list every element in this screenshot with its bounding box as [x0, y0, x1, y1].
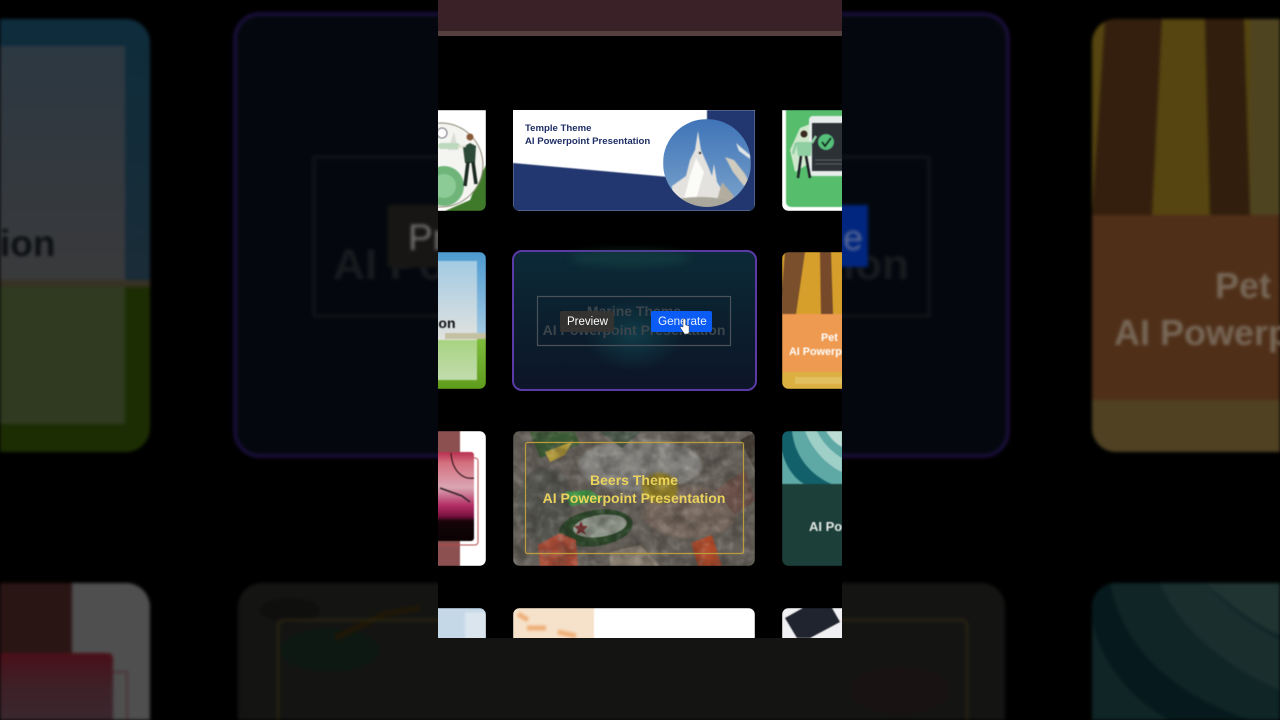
top bar	[438, 0, 842, 36]
wine photo	[438, 451, 475, 542]
card: teal waves theme (right, row 3)	[782, 431, 842, 566]
temple title	[525, 124, 650, 146]
faded title: AI Powerpoint Presentation	[543, 322, 725, 338]
card: temple theme	[513, 110, 755, 211]
pet title fragment: AI Powerp	[789, 346, 842, 358]
card: wine theme (left, row 3)	[438, 431, 486, 566]
card: laptop theme (right, row 4)	[782, 608, 882, 668]
card: field theme (left, row 2)	[438, 252, 486, 389]
generate button	[651, 311, 712, 332]
generate button: Generate	[658, 315, 707, 328]
background generate label: Generate	[700, 217, 863, 258]
temple title: AI Powerpoint Presentation	[525, 136, 650, 147]
crushed cans photo	[513, 431, 755, 566]
field title fragment: ion	[434, 315, 456, 331]
temple photo circle	[663, 119, 751, 211]
faded title	[543, 303, 725, 338]
faded title: Marine Theme	[587, 303, 681, 319]
background preview label: Preview	[408, 217, 540, 258]
beers title: AI Powerpoint Presentation	[543, 490, 725, 506]
teal title fragment: AI Po	[809, 519, 842, 534]
background card: wine theme	[0, 583, 150, 720]
icon: hand cursor	[680, 319, 689, 334]
card: sky theme (left, row 4)	[400, 608, 486, 668]
navy shapes	[513, 110, 755, 211]
pet title fragment	[789, 332, 842, 358]
beers title	[543, 472, 725, 506]
icon: standing figure	[458, 134, 476, 186]
beers title: Beers Theme	[590, 472, 678, 488]
icon: phone	[808, 115, 842, 177]
background card: field theme	[0, 19, 150, 452]
blurred background, left side	[0, 19, 150, 720]
inner frame	[538, 296, 730, 346]
background label: pet: Pet	[1215, 265, 1271, 306]
card: peach theme (row 4)	[513, 608, 755, 668]
background faint heading text: AI Powerpoint Presentation	[333, 241, 909, 289]
background card: pet theme	[1092, 19, 1280, 452]
background generate button	[700, 205, 868, 267]
card: pet theme (right, row 2)	[782, 252, 842, 389]
preview button	[560, 311, 614, 332]
background card: teal waves	[1092, 583, 1280, 720]
background text fragment: ion	[0, 223, 55, 264]
background card: beers theme	[238, 583, 1005, 720]
card: beers theme	[513, 431, 755, 566]
preview button: Preview	[567, 316, 609, 328]
background inner frame	[314, 157, 929, 316]
pet title fragment: Pet	[821, 332, 838, 344]
phone screen column	[438, 0, 842, 638]
card: marine theme, hovered	[513, 249, 756, 390]
blurred background, centre marine card	[235, 14, 1008, 456]
card: phone check theme (right, row 1)	[782, 110, 842, 211]
background preview button	[388, 205, 558, 267]
icon: standing figure	[793, 130, 816, 178]
gold frame	[526, 442, 744, 554]
card: eco theme (left, row 1)	[438, 110, 486, 211]
temple title: Temple Theme	[525, 123, 591, 134]
blurred background, right side	[238, 19, 1280, 720]
